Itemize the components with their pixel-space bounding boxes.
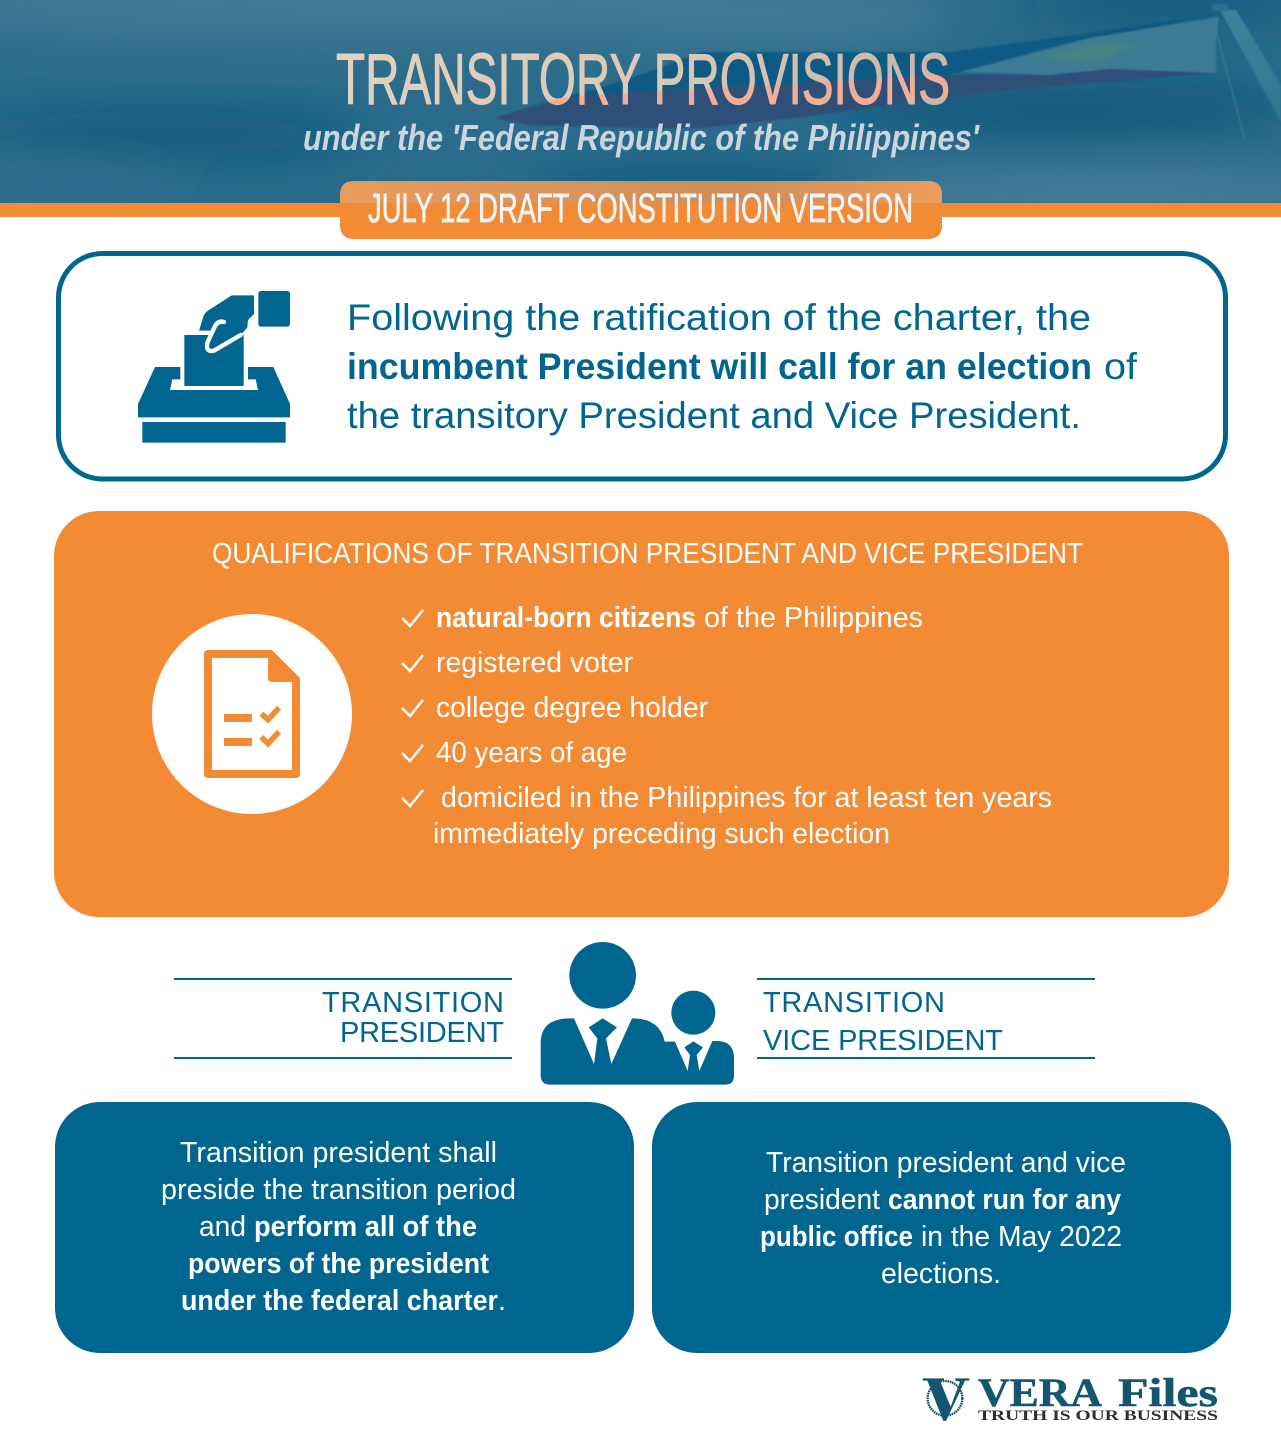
item: domicile: domiciled in the Philippines for at least ten years bbox=[441, 782, 1052, 814]
item: natural-born citizens: natural-born citizens bbox=[436, 602, 696, 634]
logo: VERA Files: Files bbox=[1118, 1370, 1218, 1415]
logo mark bbox=[923, 1378, 969, 1421]
election ban text: in the May 2022 bbox=[921, 1221, 1122, 1253]
title: TRANSITORY PROVISIONS bbox=[336, 40, 950, 120]
election ban text: Transition president and vice bbox=[766, 1147, 1126, 1179]
icon: two officials bbox=[541, 942, 734, 1085]
item: natural-born citizens: of the Philippines bbox=[704, 602, 923, 634]
heading: transition vice president bbox=[757, 979, 1095, 1058]
heading: transition president bbox=[174, 979, 512, 1058]
president text: powers of the president bbox=[188, 1248, 489, 1280]
title bbox=[336, 52, 948, 105]
item: domicile: immediately preceding such election bbox=[433, 818, 890, 850]
election ban text bbox=[760, 1147, 1126, 1290]
heading: transition president: PRESIDENT bbox=[340, 1017, 504, 1049]
election text: incumbent President will call for an election bbox=[347, 346, 1092, 387]
election ban text: president bbox=[764, 1184, 880, 1216]
title: TRANSITORY PROVISIONS bbox=[336, 40, 950, 120]
election ban text: public office bbox=[760, 1221, 913, 1253]
president text: and bbox=[199, 1211, 246, 1243]
subtitle: under the 'Federal Republic of the Philippines' bbox=[303, 117, 980, 158]
election text: Following the ratification of the charter, the bbox=[347, 297, 1091, 338]
president text: perform all of the bbox=[254, 1211, 477, 1243]
election text: of bbox=[1104, 346, 1138, 387]
item: registered voter: registered voter bbox=[436, 647, 633, 679]
president text: . bbox=[498, 1285, 506, 1317]
panel: president powers bbox=[55, 1102, 634, 1353]
logo: VERA Files: TRUTH IS OUR BUSINESS bbox=[978, 1408, 1218, 1424]
version badge: JULY 12 DRAFT CONSTITUTION VERSION bbox=[368, 185, 913, 231]
panel: election call bbox=[58, 254, 1226, 479]
election text bbox=[347, 297, 1138, 436]
icon: checklist document bbox=[152, 614, 352, 814]
flag blue band bbox=[560, 13, 1220, 98]
heading: transition president: TRANSITION bbox=[322, 987, 504, 1019]
qualifications heading: QUALIFICATIONS OF TRANSITION PRESIDENT AND VICE PRESIDENT bbox=[212, 538, 1083, 570]
election ban text: elections. bbox=[881, 1258, 1001, 1290]
president text: under the federal charter bbox=[181, 1285, 498, 1317]
header banner bbox=[0, 0, 1281, 239]
heading: transition vice president: TRANSITION bbox=[763, 987, 945, 1019]
election text: the transitory President and Vice President. bbox=[347, 395, 1081, 436]
qualifications checklist bbox=[402, 602, 1052, 850]
sky and flag photo background bbox=[0, 0, 1281, 225]
flag white triangle bbox=[960, 17, 1219, 75]
orange band bbox=[0, 203, 1281, 217]
item: domicile bbox=[402, 782, 1052, 850]
president text: preside the transition period bbox=[161, 1174, 516, 1206]
president text bbox=[161, 1137, 516, 1317]
panel: qualifications bbox=[54, 511, 1229, 917]
logo: VERA Files: VERA bbox=[978, 1370, 1102, 1415]
item: natural-born citizens bbox=[402, 602, 923, 634]
flag pole bbox=[1220, 10, 1281, 122]
item: age: 40 years of age bbox=[436, 737, 627, 769]
item: college degree: college degree holder bbox=[436, 692, 708, 724]
icon: ballot box bbox=[138, 291, 290, 443]
logo: VERA Files bbox=[923, 1370, 1218, 1424]
election ban text: cannot run for any bbox=[888, 1184, 1121, 1216]
heading: transition vice president: VICE PRESIDENT bbox=[763, 1025, 1003, 1057]
version badge bbox=[340, 181, 942, 239]
flag red band bbox=[494, 69, 1216, 128]
panel: election ban bbox=[652, 1102, 1231, 1353]
president text: Transition president shall bbox=[180, 1137, 497, 1169]
